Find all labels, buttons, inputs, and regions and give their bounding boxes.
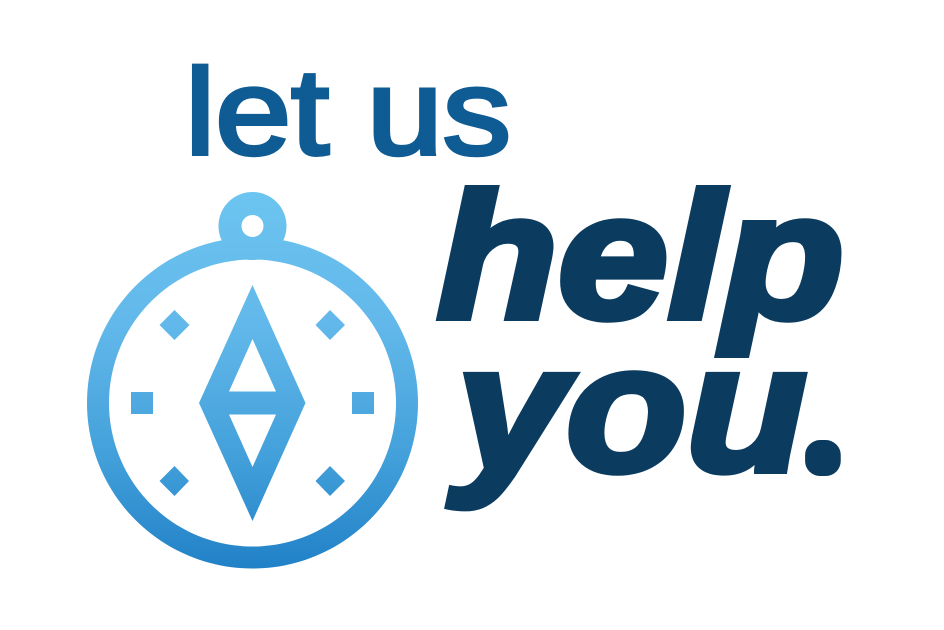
northwest tick	[160, 310, 190, 340]
compass needle	[199, 285, 306, 521]
heading: help: help	[437, 156, 844, 356]
icon: compass	[87, 192, 418, 569]
heading: you: you	[448, 308, 807, 510]
compass ring	[87, 238, 418, 569]
heading: let us: let us	[185, 44, 511, 180]
southeast tick	[316, 466, 345, 496]
heading: full stop: .	[817, 426, 829, 470]
east tick	[352, 392, 374, 414]
northeast tick	[316, 310, 345, 340]
west tick	[131, 392, 153, 414]
southwest tick	[160, 466, 189, 496]
compass loop	[218, 192, 286, 260]
